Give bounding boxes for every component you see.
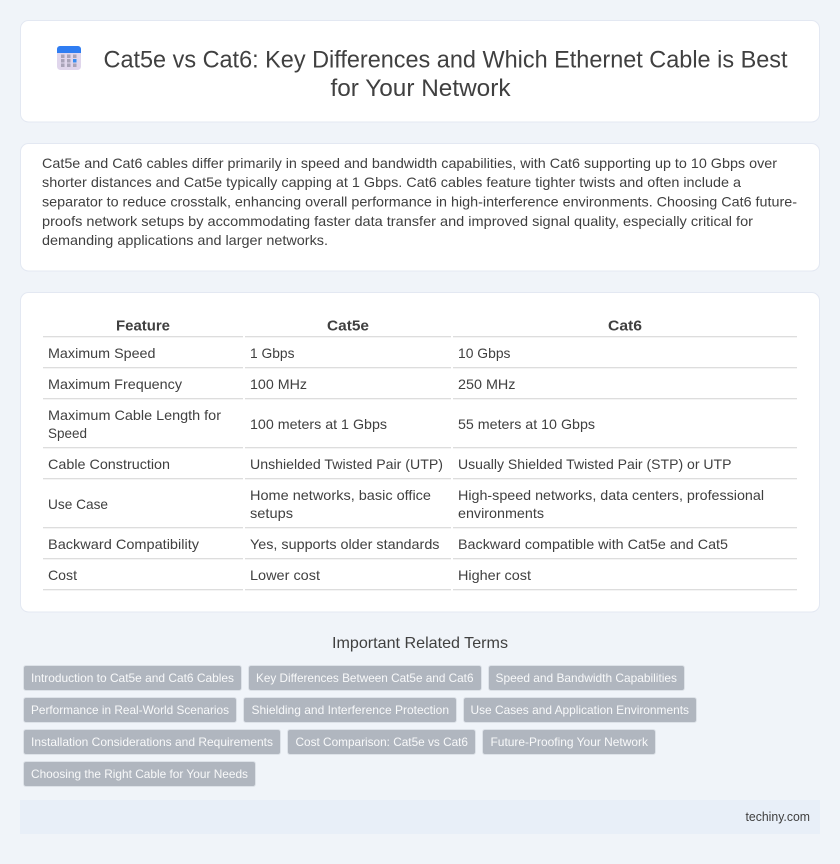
row: backward compatibility xyxy=(48,536,728,552)
row: backward compatibility: Backward Compatibility xyxy=(48,536,199,552)
row: use case: Use Case xyxy=(48,496,108,512)
title: for Your Network xyxy=(330,75,512,102)
title: Cat5e vs Cat6: Key Differences and Which Ethernet Cable is Best xyxy=(104,46,788,74)
title xyxy=(104,46,788,102)
tag: choosing the right cable xyxy=(24,762,256,786)
tag: key differences xyxy=(248,666,482,690)
tag: future-proofing xyxy=(482,730,656,754)
panel: intro paragraph: separator to reduce crosstalk, enhancing overall performance in high-interference environments. Choosing Cat6 future- xyxy=(42,194,797,210)
tag: choosing the right cable: Choosing the Right Cable for Your Needs xyxy=(31,767,248,781)
table header: Feature xyxy=(116,318,170,334)
row: backward compatibility: Yes, supports older standards xyxy=(250,536,440,552)
tag: performance xyxy=(24,698,236,722)
row: cost: Higher cost xyxy=(458,567,531,583)
row: use case: environments xyxy=(458,505,544,521)
footer: techiny.com xyxy=(746,810,810,824)
row: use case: Home networks, basic office xyxy=(250,487,431,503)
tag: installation xyxy=(24,730,280,754)
tag: cost comparison: Cost Comparison: Cat5e vs Cat6 xyxy=(296,735,468,749)
row: maximum frequency: Maximum Frequency xyxy=(48,376,182,392)
table header: Cat5e xyxy=(327,318,369,334)
row: cable construction: Usually Shielded Twisted Pair (STP) or UTP xyxy=(458,456,732,472)
row: maximum speed: 10 Gbps xyxy=(458,345,510,361)
tag: introduction: Introduction to Cat5e and Cat6 Cables xyxy=(31,671,234,685)
row: use case xyxy=(48,487,764,521)
row: cable construction: Cable Construction xyxy=(48,456,170,472)
tag: shielding: Shielding and Interference Protection xyxy=(252,703,449,717)
header panel xyxy=(20,20,820,122)
row: maximum frequency xyxy=(48,376,516,392)
tag: performance: Performance in Real-World Scenarios xyxy=(31,703,229,717)
panel: intro paragraph: Cat5e and Cat6 cables differ primarily in speed and bandwidth capabilities, with Cat6 supporting up to 10 Gbps over xyxy=(42,155,777,171)
panel: intro paragraph: shorter distances and Cat5e typically capping at 1 Gbps. Cat6 cables feature tighter twists and often include a xyxy=(42,174,741,190)
tag: future-proofing: Future-Proofing Your Network xyxy=(490,735,649,749)
tag: speed and bandwidth: Speed and Bandwidth Capabilities xyxy=(496,671,677,685)
row: maximum cable length: Maximum Cable Length for xyxy=(48,407,221,423)
table header: Cat6 xyxy=(608,318,642,334)
row: use case: High-speed networks, data centers, professional xyxy=(458,487,764,503)
tag: cost comparison xyxy=(288,730,476,754)
row: cable construction xyxy=(48,456,732,472)
heading: important related terms: Important Related Terms xyxy=(332,635,508,652)
panel: intro paragraph: demanding applications and larger networks. xyxy=(42,232,328,248)
tag: speed and bandwidth xyxy=(488,666,684,690)
tag: key differences: Key Differences Between Cat5e and Cat6 xyxy=(256,671,474,685)
row: cost xyxy=(48,567,531,583)
icon: calendar grid xyxy=(57,46,81,70)
row: maximum frequency: 100 MHz xyxy=(250,376,307,392)
row: maximum cable length xyxy=(48,407,595,441)
row: maximum cable length: Speed xyxy=(48,425,87,441)
row: maximum cable length: 55 meters at 10 Gbps xyxy=(458,416,595,432)
row: maximum frequency: 250 MHz xyxy=(458,376,516,392)
row: maximum cable length: 100 meters at 1 Gbps xyxy=(250,416,387,432)
row: maximum speed: Maximum Speed xyxy=(48,345,156,361)
row: cable construction: Unshielded Twisted Pair (UTP) xyxy=(250,456,443,472)
row: backward compatibility: Backward compatible with Cat5e and Cat5 xyxy=(458,536,728,552)
table header xyxy=(116,318,642,334)
panel: intro paragraph: proofs network setups by accommodating faster data transfer and improved signal quality, especially critical for xyxy=(42,213,753,229)
tag: shielding xyxy=(244,698,456,722)
row: cost: Cost xyxy=(48,567,77,583)
related term tags xyxy=(24,666,696,786)
row: maximum speed xyxy=(48,345,510,361)
tag: use cases xyxy=(464,698,696,722)
row: maximum speed: 1 Gbps xyxy=(250,345,294,361)
tag: use cases: Use Cases and Application Environments xyxy=(470,703,689,717)
footer xyxy=(20,800,820,834)
panel: intro paragraph xyxy=(20,144,820,271)
row: cost: Lower cost xyxy=(250,567,320,583)
tag: installation: Installation Considerations and Requirements xyxy=(31,735,273,749)
tag: introduction xyxy=(24,666,242,690)
row: use case: setups xyxy=(250,505,293,521)
panel: comparison table xyxy=(20,292,820,612)
